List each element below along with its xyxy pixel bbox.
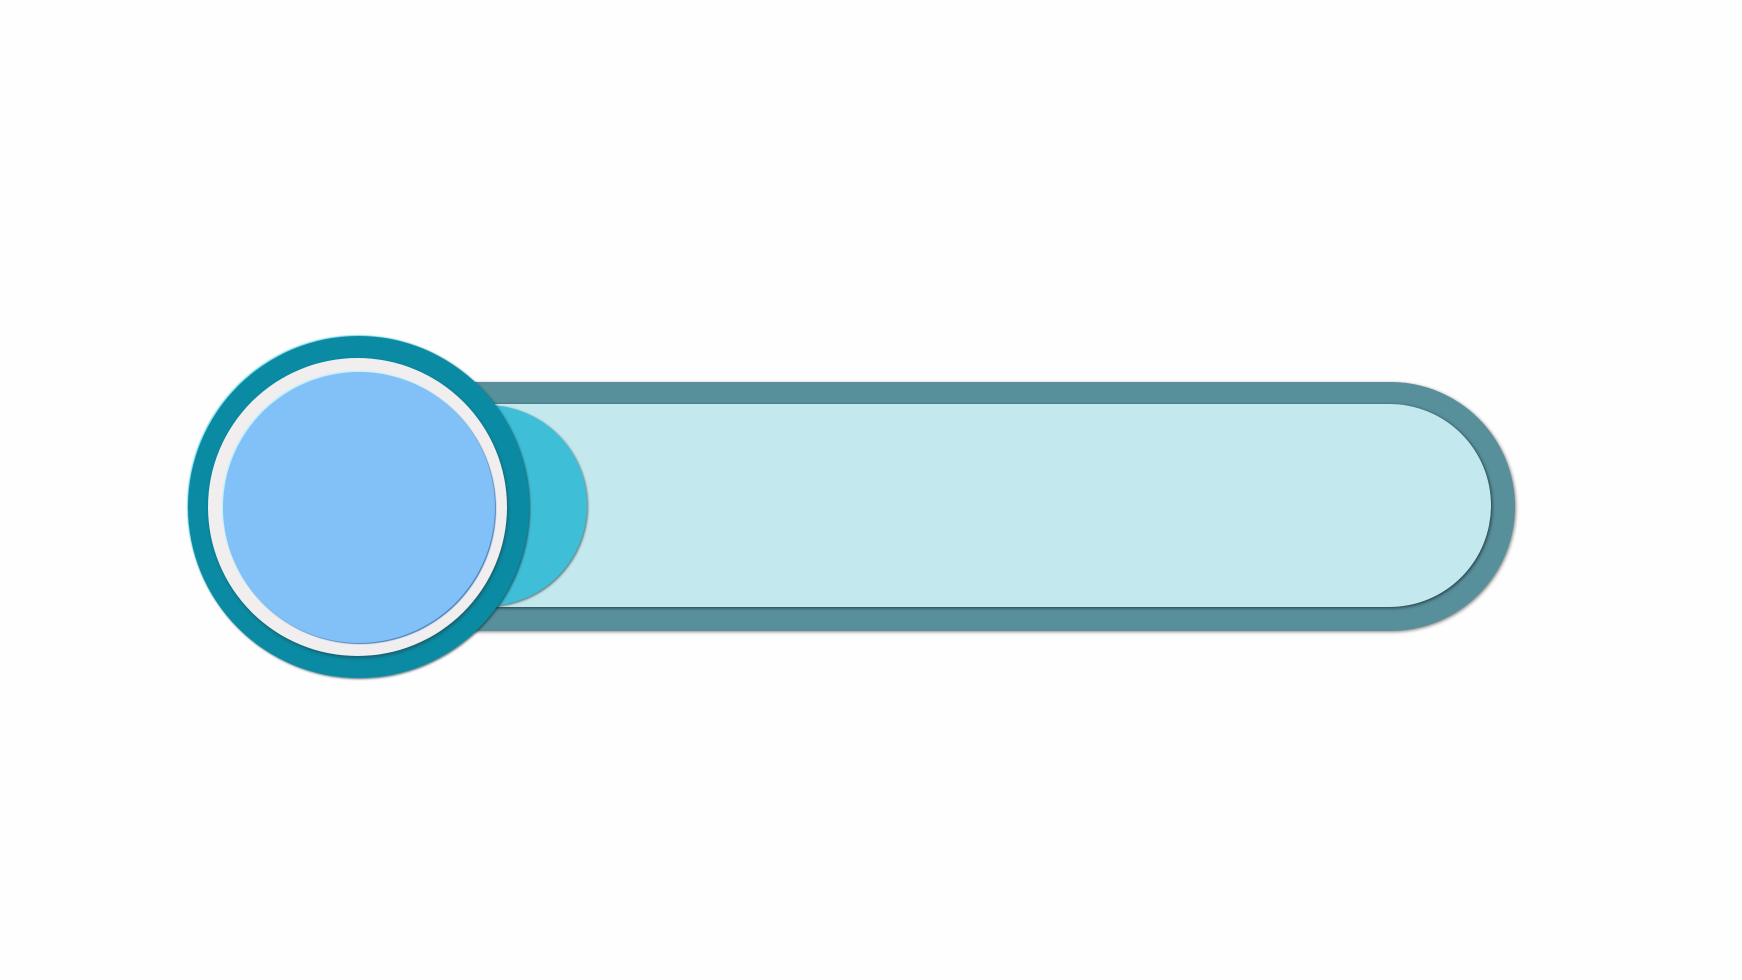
shape: teal outer ring of badge bbox=[188, 336, 529, 678]
panel: inner light pill bbox=[380, 404, 1491, 607]
shape: white ring of badge bbox=[208, 358, 507, 656]
banner: pill with circle badge bbox=[186, 334, 1518, 681]
shape: blue inner disc of badge bbox=[223, 372, 495, 643]
panel: outer pill frame bbox=[280, 382, 1515, 631]
shape: teal tab behind badge bbox=[386, 405, 587, 606]
